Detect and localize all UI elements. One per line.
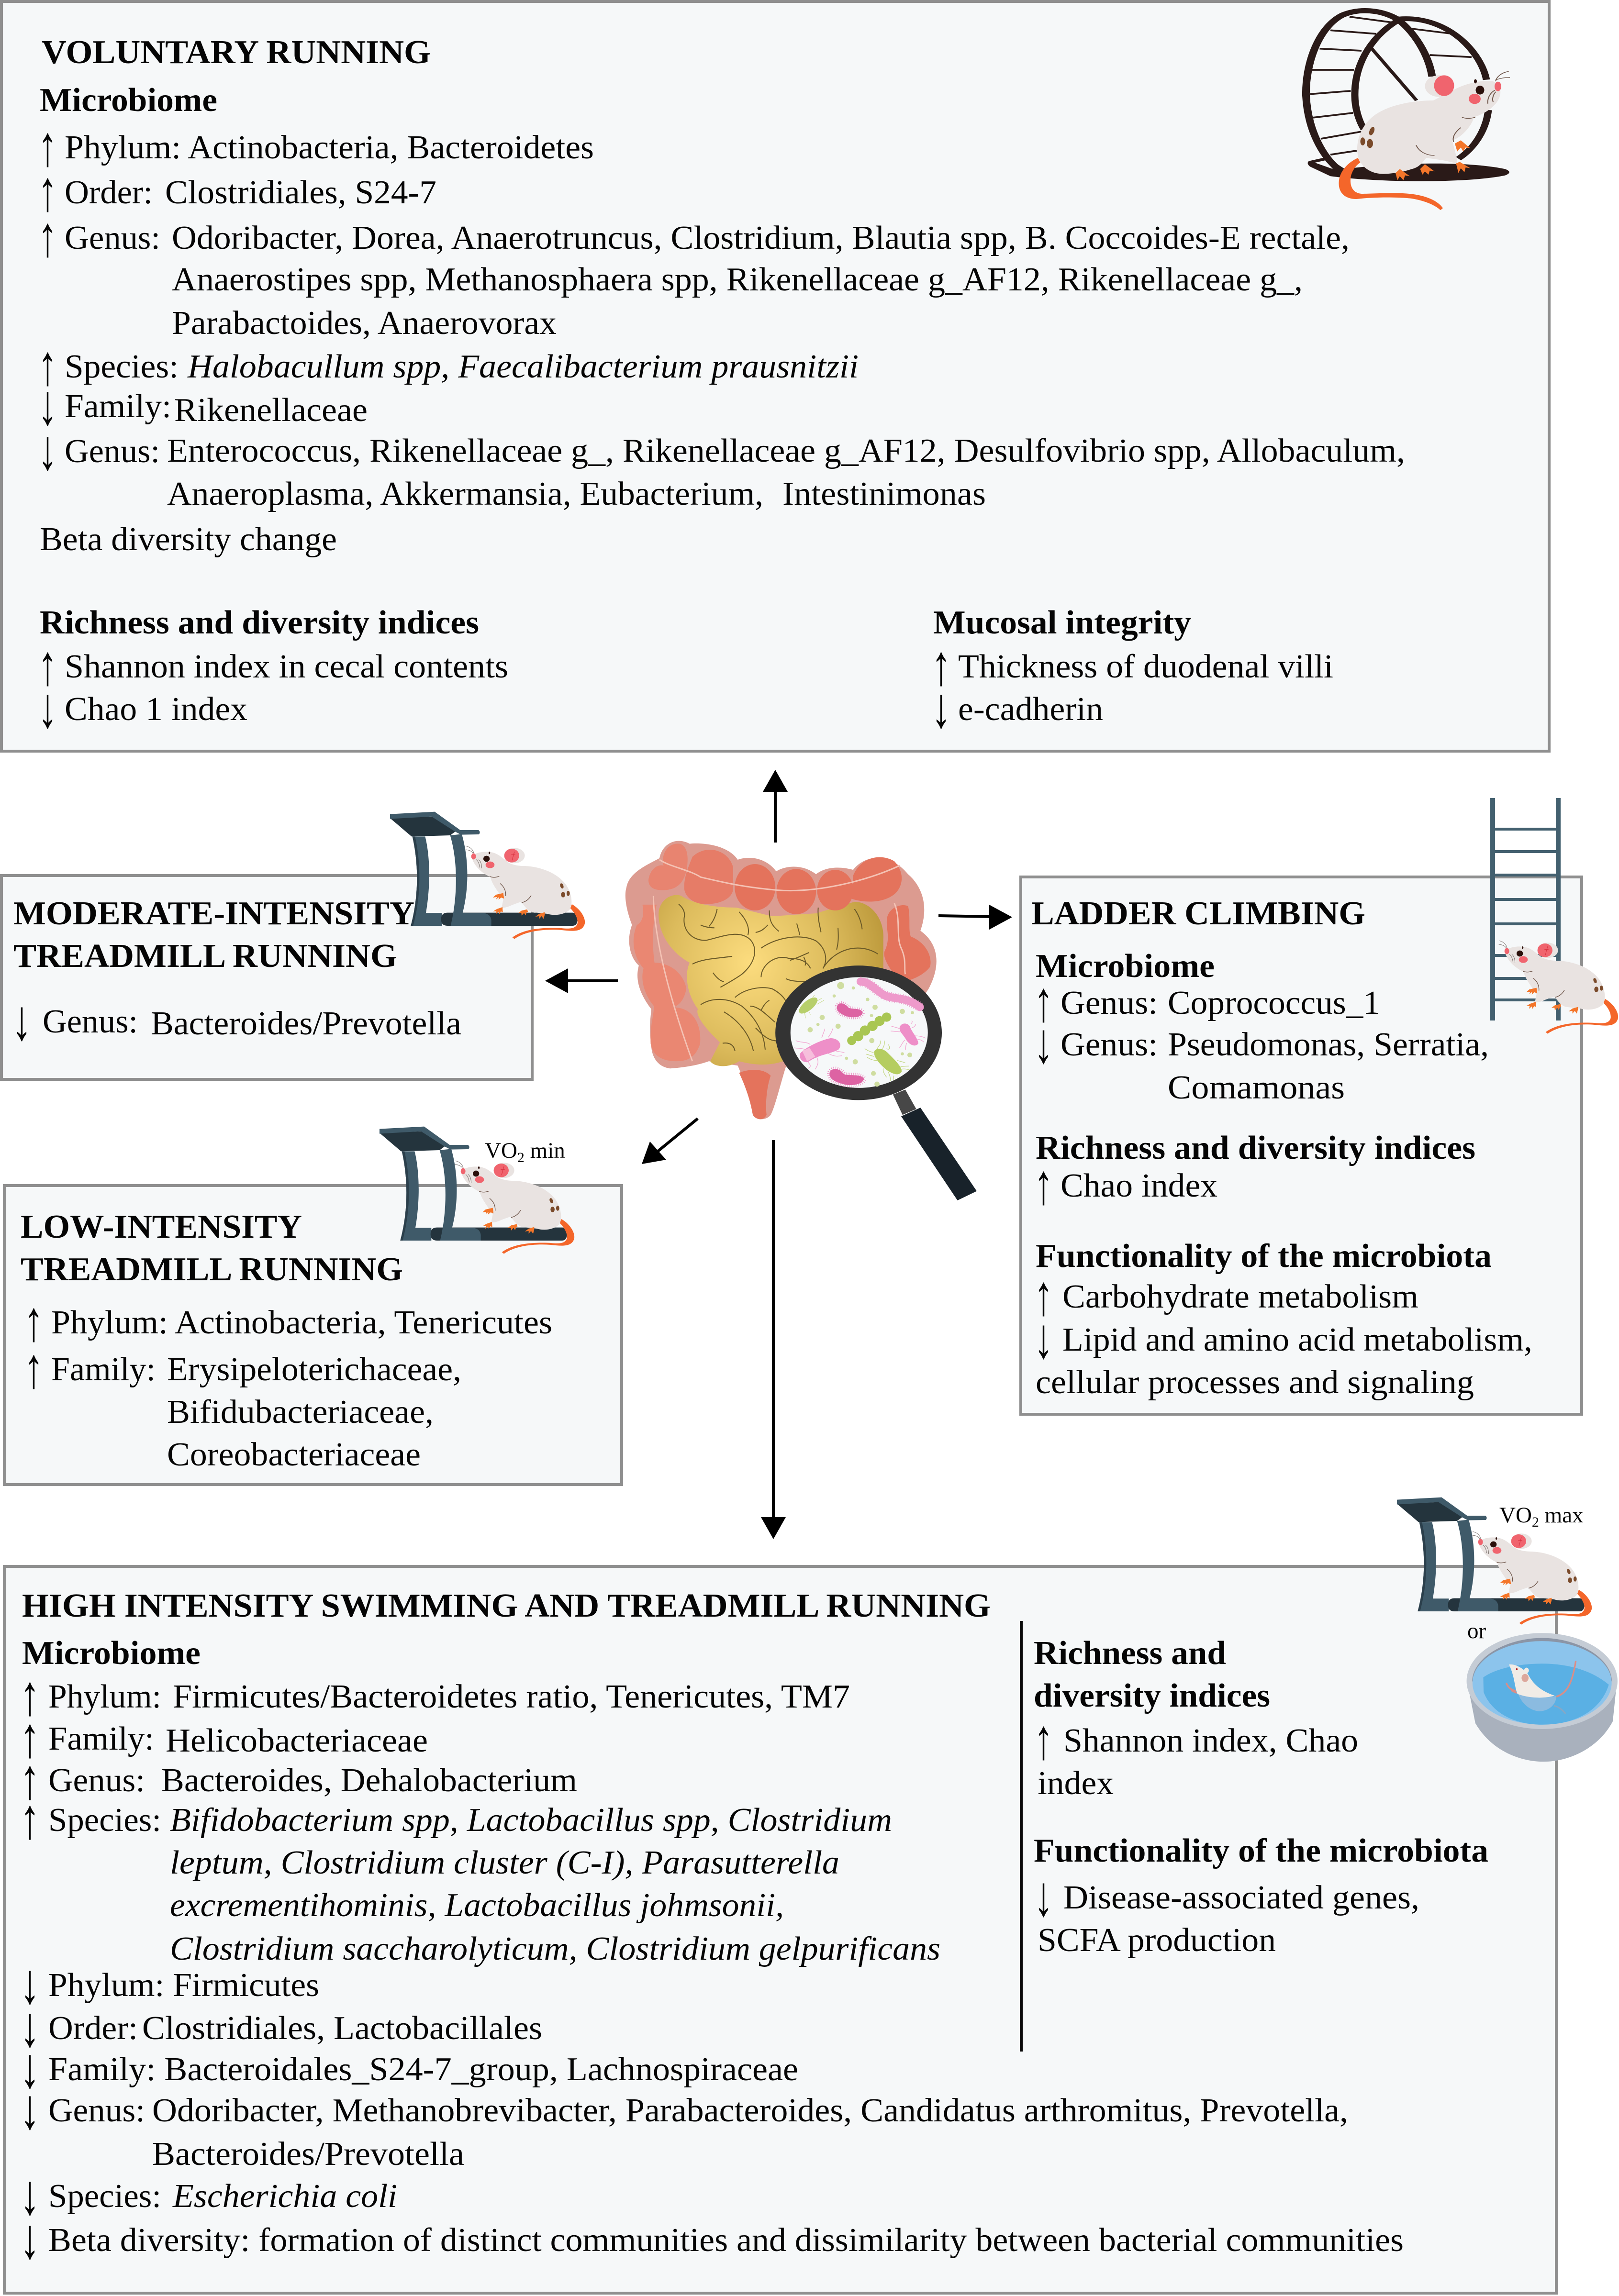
row: genus down: Genus: — [1061, 1026, 1158, 1063]
arrow: right to ladder climbing — [938, 905, 1012, 930]
row: chao index: Chao index — [1061, 1167, 1217, 1204]
small bowel — [659, 895, 883, 1066]
row: phylum down: Phylum: Firmicutes — [48, 1967, 319, 2004]
row: species down: Species: — [48, 2178, 161, 2215]
row: genus down: Bacteroides/Prevotella — [152, 2136, 464, 2173]
row: genus up: ↑ — [38, 205, 57, 268]
row: lipid and amino acid metabolism: ↓ — [1034, 1307, 1053, 1370]
row: genus down — [12, 988, 461, 1052]
row: genus down: ↓ — [12, 988, 32, 1052]
panel: ladder climbing — [1021, 877, 1582, 1414]
row: phylum up: Phylum: Actinobacteria, Bacteroidetes — [65, 129, 594, 166]
row: order down: Clostridiales, Lactobacillales — [142, 2010, 542, 2047]
row: family down — [38, 373, 368, 437]
row: shannon index: Shannon index in cecal contents — [65, 648, 508, 685]
row: species up: Halobacullum spp, Faecalibacterium prausnitzii — [187, 348, 859, 385]
heading: high intensity swimming and treadmill running: HIGH INTENSITY SWIMMING AND TREADMILL RUNNING — [22, 1587, 991, 1624]
row: chao 1 index — [38, 676, 247, 740]
row: genus up: Coprococcus_1 — [1168, 985, 1380, 1021]
row: thickness of duodenal villi: ↑ — [931, 633, 951, 697]
row: genus down: Genus: — [43, 1003, 138, 1040]
row: species up: Bifidobacterium spp, Lactobacillus spp, Clostridium — [170, 1802, 892, 1839]
row: species down: ↓ — [20, 2163, 40, 2227]
row: genus up: Bacteroides, Dehalobacterium — [161, 1762, 577, 1799]
label: VO2 min: VO — [485, 1138, 517, 1163]
subheading: richness and diversity indices — [1034, 1635, 1270, 1714]
row: genus up: Anaerostipes spp, Methanosphaera spp, Rikenellaceae g_AF12, Rikenellaceae g_, — [172, 261, 1303, 298]
row: genus up: Parabactoides, Anaerovorax — [172, 305, 557, 342]
heading: moderate-intensity treadmill running — [13, 895, 414, 975]
subheading: microbiome: Microbiome — [22, 1635, 201, 1672]
row: genus down: Bacteroides/Prevotella — [151, 1005, 461, 1042]
row: genus up — [1034, 970, 1380, 1033]
subheading: functionality of the microbiota: Functionality of the microbiota — [1034, 1832, 1488, 1869]
row: species down: Escherichia coli — [172, 2178, 397, 2215]
panel: high intensity swimming and treadmill running — [4, 1566, 1556, 2293]
subheading: richness and diversity indices: diversity indices — [1034, 1677, 1270, 1714]
row: family up — [24, 1336, 461, 1473]
row: shannon and chao index: Shannon index, Chao — [1063, 1722, 1358, 1759]
row: disease-associated genes — [1034, 1864, 1419, 1959]
row: shannon index: ↑ — [38, 633, 57, 697]
row: carbohydrate metabolism: Carbohydrate metabolism — [1062, 1278, 1418, 1315]
row: genus down — [20, 2077, 1348, 2173]
row: phylum up — [24, 1289, 552, 1353]
heading: low-intensity treadmill running: LOW-INTENSITY — [21, 1209, 302, 1245]
row: genus up: ↑ — [1034, 970, 1053, 1033]
row: species down — [20, 2163, 397, 2227]
row: order down — [20, 1995, 542, 2059]
row: disease-associated genes: Disease-associated genes, — [1063, 1879, 1419, 1916]
subheading: richness and diversity indices: Richness and diversity indices — [1036, 1130, 1475, 1166]
row: phylum up: ↑ — [20, 1664, 40, 1727]
icon: ladder — [1490, 798, 1561, 1020]
row: genus down: ↓ — [1034, 1011, 1053, 1075]
row: chao index: ↑ — [1034, 1153, 1053, 1216]
row: shannon index — [38, 633, 508, 697]
heading: voluntary running: VOLUNTARY RUNNING — [42, 34, 431, 71]
row: disease-associated genes: SCFA production — [1038, 1922, 1276, 1959]
icon: mouse on treadmill (high) — [1397, 1497, 1592, 1625]
row: e-cadherin: ↓ — [931, 676, 951, 740]
row: chao 1 index: ↓ — [38, 676, 57, 740]
row: family up — [20, 1706, 428, 1769]
row: species up — [38, 333, 859, 397]
row: genus down: Intestinimonas — [782, 476, 986, 512]
row: family down: Rikenellaceae — [174, 392, 368, 429]
row: genus down: Genus: — [48, 2092, 145, 2129]
arrow: down to high intensity — [761, 1140, 786, 1539]
row: phylum down: ↓ — [20, 1952, 40, 2016]
row: genus down — [1034, 1011, 1489, 1106]
row: disease-associated genes: ↓ — [1034, 1864, 1053, 1928]
row: shannon and chao index — [1034, 1708, 1358, 1802]
row: lipid and amino acid metabolism — [1034, 1307, 1532, 1401]
row: family down: ↓ — [20, 2036, 40, 2100]
row: species up: Clostridium saccharolyticum, Clostridium gelpurificans — [170, 1930, 940, 1967]
row: order up: ↑ — [38, 159, 57, 223]
row: family up: Erysipeloterichaceae, — [167, 1351, 461, 1388]
icon: climbing mouse — [1499, 941, 1618, 1034]
row: family up: Coreobacteriaceae — [167, 1436, 421, 1473]
row: family up: Helicobacteriaceae — [166, 1722, 428, 1759]
row: genus down: Anaeroplasma, Akkermansia, Eubacterium, — [167, 476, 763, 512]
row: phylum up — [20, 1664, 850, 1727]
row: genus up: ↑ — [20, 1747, 40, 1811]
row: phylum up: Firmicutes/Bacteroidetes ratio, Tenericutes, TM7 — [173, 1678, 850, 1715]
row: family down: ↓ — [38, 373, 57, 437]
row: family up: Bifidubacteriaceae, — [167, 1394, 434, 1431]
row: species up: ↑ — [20, 1787, 40, 1851]
subheading: mucosal integrity: Mucosal integrity — [933, 604, 1191, 641]
row: genus down: Enterococcus, Rikenellaceae g_, Rikenellaceae g_AF12, Desulfovibrio spp, Allobaculum, — [167, 433, 1405, 469]
icon: swimming pool with rat — [1467, 1633, 1618, 1762]
row: genus up: Genus: — [1061, 985, 1158, 1021]
label: VO2 min: min — [525, 1138, 565, 1163]
magnifier handle — [893, 1090, 916, 1115]
arrow: diagonal to low-intensity — [642, 1119, 698, 1164]
row: beta diversity down: ↓ — [20, 2207, 40, 2271]
icon: mouse on treadmill (moderate) — [390, 812, 585, 939]
row: family up: Family: — [48, 1720, 154, 1757]
subheading: microbiome: Microbiome — [40, 82, 217, 119]
icon: mouse on treadmill (low) — [380, 1127, 574, 1254]
row: family up: Family: — [51, 1351, 156, 1388]
row: order down: Order: — [48, 2010, 138, 2047]
subheading: richness and diversity indices: Richness and diversity indices — [40, 604, 479, 641]
row: species up: excrementihominis, Lactobacillus johmsonii, — [170, 1887, 784, 1924]
row: genus up: Genus: — [65, 220, 160, 256]
row: genus down: ↓ — [20, 2077, 40, 2141]
row: order up: Clostridiales, S24-7 — [165, 174, 436, 211]
label: VO2 max: 2 — [1532, 1514, 1539, 1530]
label: VO2 max: max — [1539, 1503, 1584, 1528]
row: genus up: Odoribacter, Dorea, Anaerotruncus, Clostridium, Blautia spp, B. Coccoides-E rectale, — [172, 220, 1350, 256]
row: phylum up: Phylum: — [48, 1678, 161, 1715]
colon outer wall — [625, 841, 937, 1119]
row: genus down: Genus: — [65, 433, 160, 470]
magnifier lens — [775, 965, 942, 1100]
heading: low-intensity treadmill running — [21, 1209, 403, 1288]
icon: intestine with magnifying glass — [625, 841, 977, 1200]
row: order down: ↓ — [20, 1995, 40, 2059]
icon: bacteria in the lens — [794, 982, 926, 1087]
subheading: functionality of the microbiota: Functionality of the microbiota — [1036, 1238, 1492, 1275]
row: phylum up: ↑ — [24, 1289, 44, 1353]
row: phylum up: ↑ — [38, 114, 57, 178]
row: order up: Order: — [65, 174, 153, 211]
row: e-cadherin: e-cadherin — [958, 691, 1103, 728]
subheading: richness and diversity indices: Richness and — [1034, 1635, 1226, 1672]
subheading: microbiome: Microbiome — [1036, 948, 1215, 985]
row: species up: ↑ — [38, 333, 57, 397]
row: family down: Family: — [65, 388, 171, 425]
row: species up: Species: — [65, 348, 179, 385]
row: phylum down — [20, 1952, 319, 2016]
row: genus down: ↓ — [38, 418, 57, 482]
row: order up — [38, 159, 436, 223]
row: genus down — [38, 418, 1405, 512]
heading: ladder climbing: LADDER CLIMBING — [1031, 895, 1365, 932]
label: or: or — [1467, 1619, 1486, 1643]
row: family up: ↑ — [24, 1336, 44, 1400]
row: genus down: Comamonas — [1168, 1069, 1345, 1106]
row: phylum up: Phylum: Actinobacteria, Tenericutes — [51, 1304, 552, 1341]
row: carbohydrate metabolism — [1034, 1264, 1418, 1327]
row: family down — [20, 2036, 798, 2100]
row: beta diversity down: Beta diversity: formation of distinct communities and dissimilarity between bacterial communities — [48, 2222, 1404, 2259]
row: species up: leptum, Clostridium cluster (C-I), Parasutterella — [170, 1844, 839, 1881]
heading: low-intensity treadmill running: TREADMILL RUNNING — [21, 1251, 403, 1288]
row: genus up: Genus: — [48, 1762, 145, 1799]
row: family up: ↑ — [20, 1706, 40, 1769]
heading: moderate-intensity treadmill running: MODERATE-INTENSITY — [13, 895, 414, 932]
row: chao 1 index: Chao 1 index — [65, 691, 247, 728]
label: VO2 min: 2 — [517, 1150, 525, 1165]
row: carbohydrate metabolism: ↑ — [1034, 1264, 1053, 1327]
row: shannon and chao index: index — [1038, 1765, 1114, 1802]
row: thickness of duodenal villi — [931, 633, 1333, 697]
row: species up — [20, 1787, 940, 1967]
row: family down: Family: Bacteroidales_S24-7_group, Lachnospiraceae — [48, 2051, 798, 2088]
panel: voluntary running — [1, 1, 1549, 751]
row: shannon and chao index: ↑ — [1034, 1708, 1053, 1771]
panel: low-intensity treadmill running — [4, 1186, 622, 1485]
colon haustra — [634, 843, 931, 1119]
row: lipid and amino acid metabolism: Lipid and amino acid metabolism, — [1062, 1321, 1532, 1358]
row: thickness of duodenal villi: Thickness of duodenal villi — [958, 648, 1333, 685]
heading: moderate-intensity treadmill running: TREADMILL RUNNING — [13, 938, 397, 975]
row: genus down: Odoribacter, Methanobrevibacter, Parabacteroides, Candidatus arthromitus, Prevotella, — [152, 2092, 1348, 2129]
label: VO2 max: VO — [1499, 1503, 1532, 1528]
panel: moderate-intensity treadmill running — [1, 876, 532, 1079]
row: phylum up — [38, 114, 594, 178]
row: e-cadherin — [931, 676, 1103, 740]
row: chao index — [1034, 1153, 1217, 1216]
arrow: up to voluntary running — [763, 770, 788, 843]
row: genus up — [38, 205, 1350, 342]
icon: mouse in running wheel — [1306, 11, 1510, 210]
row: genus down: Pseudomonas, Serratia, — [1168, 1026, 1489, 1063]
row: beta diversity down — [20, 2207, 1404, 2271]
row: genus up — [20, 1747, 577, 1811]
text: beta diversity change: Beta diversity change — [40, 521, 337, 558]
arrow: left to moderate-intensity — [545, 968, 618, 993]
row: species up: Species: — [48, 1802, 161, 1839]
row: lipid and amino acid metabolism: cellular processes and signaling — [1036, 1364, 1474, 1401]
